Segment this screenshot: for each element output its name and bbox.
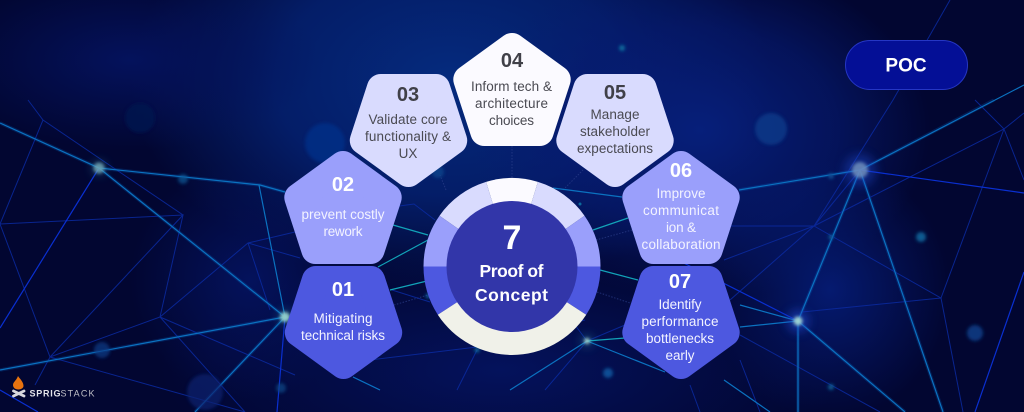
panel: 03 Validate core functionality and UX: Validate core: [368, 112, 448, 127]
teal lines: [378, 218, 638, 341]
panel: 04 Inform tech and architecture choices: [467, 47, 557, 132]
panel: 02 prevent costly rework: rework: [324, 224, 363, 239]
panel: 02 prevent costly rework: [298, 165, 388, 250]
center circle: 7 Proof of Concept: Proof of: [480, 261, 544, 281]
donut chart: seven segments: [424, 178, 600, 355]
panel: 07 Identify performance bottlenecks early: bottlenecks: [646, 331, 714, 346]
glow dots: [92, 45, 983, 410]
panel: 02 prevent costly rework: 02: [332, 174, 354, 196]
panel: 01 Mitigating technical risks: 01: [332, 279, 354, 301]
panel: 03 Validate core functionality and UX: functionality &: [365, 129, 451, 144]
panel: 01 Mitigating technical risks: technical risks: [301, 328, 385, 343]
panel: 05 Manage stakeholder expectations: stakeholder: [580, 124, 650, 139]
panel: 06 Improve communication and collaboration: Improve: [656, 186, 706, 201]
panel: 04 Inform tech and architecture choices: architecture: [475, 96, 548, 111]
panel: 06 Improve communication and collaboration: 06: [670, 160, 692, 182]
logo: Sprigstack: [13, 376, 94, 398]
panel: 04 Inform tech and architecture choices: Inform tech &: [471, 79, 552, 94]
icon: flame and logs: [13, 376, 24, 396]
panel: 06 Improve communication and collaboration: communicat: [643, 203, 719, 218]
panel: 04 Inform tech and architecture choices: 04: [501, 50, 524, 72]
POC badge: POC: [885, 56, 927, 76]
panel: 03 Validate core functionality and UX: UX: [399, 146, 417, 161]
panel: 02 prevent costly rework: prevent costly: [302, 207, 385, 222]
panel: 06 Improve communication and collaboration: ion &: [666, 220, 696, 235]
strong blue lines: [0, 168, 1024, 412]
panel: 05 Manage stakeholder expectations: 05: [604, 82, 626, 104]
panel: 01 Mitigating technical risks: Mitigating: [314, 311, 372, 326]
bright cyan lines: [0, 85, 1024, 412]
panel: 05 Manage stakeholder expectations: expectations: [577, 141, 653, 156]
panel: 01 Mitigating technical risks: [299, 279, 388, 365]
panel: 07 Identify performance bottlenecks early: 07: [669, 271, 691, 293]
panel: 03 Validate core functionality and UX: 03: [397, 84, 419, 106]
panel: 07 Identify performance bottlenecks early: Identify: [658, 297, 702, 312]
panel: 05 Manage stakeholder expectations: Manage: [590, 107, 640, 122]
panel: 04 Inform tech and architecture choices: choices: [489, 113, 534, 128]
panel: 05 Manage stakeholder expectations: [570, 82, 660, 173]
panel: 03 Validate core functionality and UX: [364, 84, 453, 173]
panel: 06 Improve communication and collaboration: [636, 160, 726, 252]
dotted lines: [394, 146, 650, 305]
panel: 07 Identify performance bottlenecks early: early: [666, 348, 695, 363]
panel: 07 Identify performance bottlenecks early: performance: [642, 314, 718, 329]
panel: 06 Improve communication and collaboration: collaboration: [642, 237, 720, 252]
panel: 07 Identify performance bottlenecks early: [636, 271, 726, 365]
center circle: 7 Proof of Concept: 7: [503, 219, 521, 257]
logo: Sprigstack: STACK: [60, 388, 94, 398]
POC badge: [846, 40, 968, 90]
center circle: 7 Proof of Concept: [446, 201, 578, 332]
center circle: 7 Proof of Concept: Concept: [475, 285, 548, 305]
logo: Sprigstack: SPRIG: [30, 388, 60, 398]
glow under bright lines: [0, 100, 994, 412]
